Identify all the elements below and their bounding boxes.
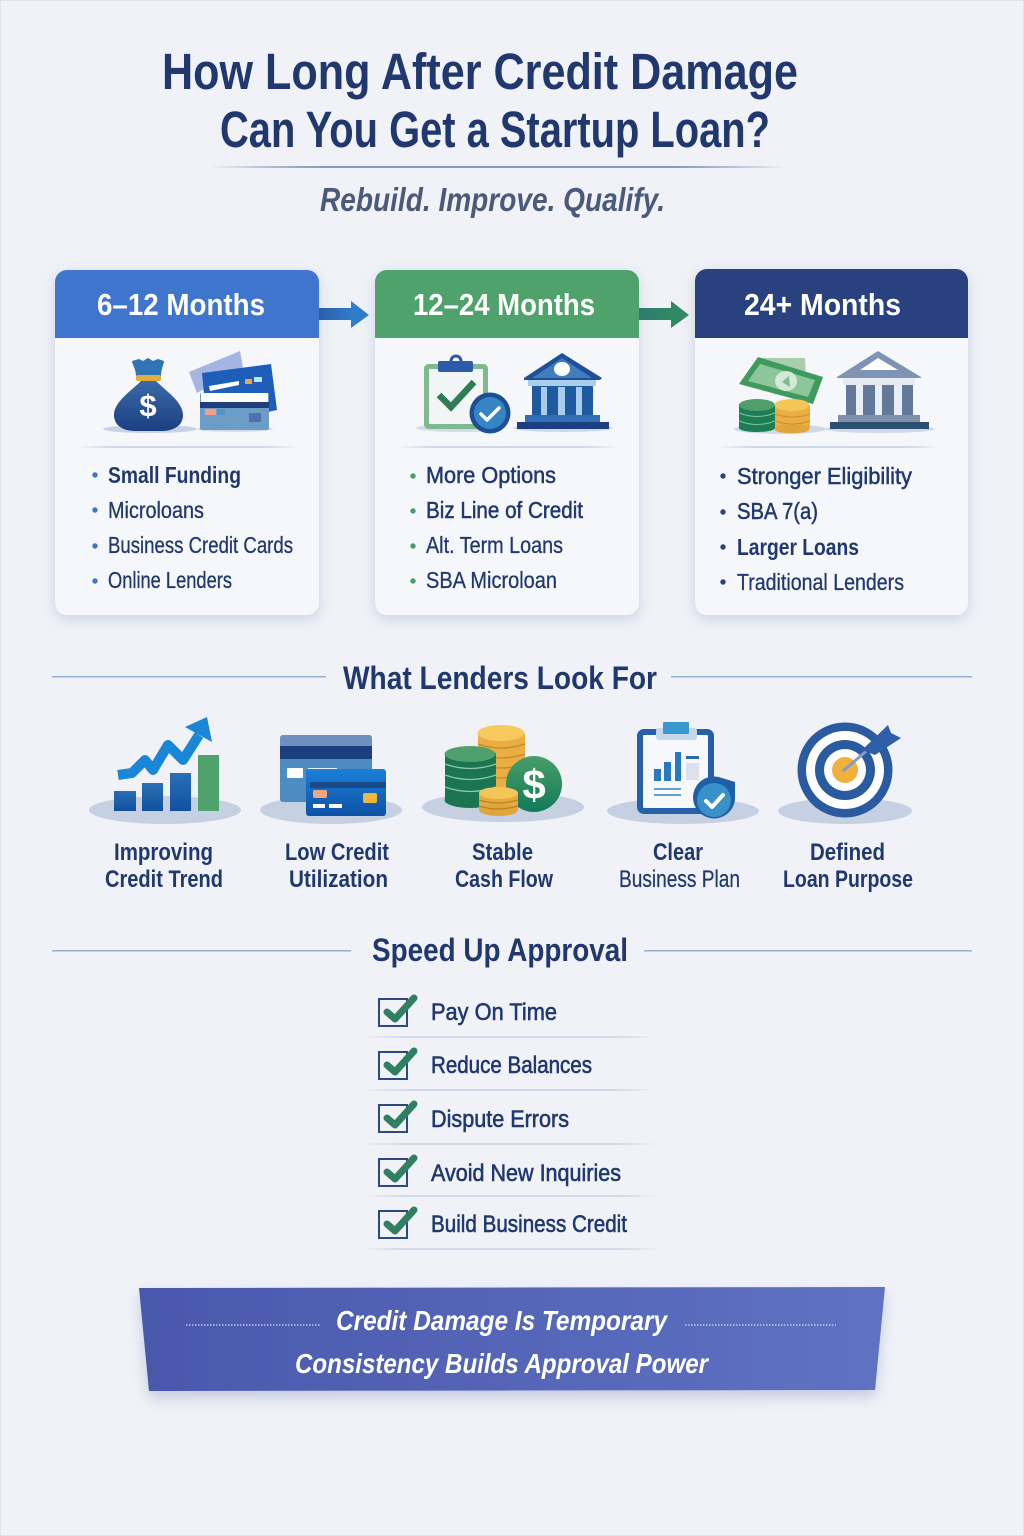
caption: clear business plan: Clear <box>653 839 703 866</box>
list: 6-12 months <box>92 462 293 593</box>
banner: closing message <box>139 1287 885 1391</box>
item: build business credit: Build Business Credit <box>431 1211 627 1238</box>
list: 6-12 months: Online Lenders <box>108 567 232 593</box>
caption: defined loan purpose <box>783 839 913 893</box>
caption: improving credit trend: Credit Trend <box>105 866 223 893</box>
item: dispute errors: Dispute Errors <box>431 1106 569 1133</box>
icon: gray bank <box>825 351 935 433</box>
caption: stable cash flow: Stable <box>472 839 533 866</box>
section heading: what lenders look for: What Lenders Look For <box>343 660 657 696</box>
section heading: speed up approval: Speed Up Approval <box>372 932 628 968</box>
list: 12-24 months: SBA Microloan <box>426 567 557 593</box>
arrow: to 12-24 months <box>319 301 369 328</box>
list: 6-12 months: Microloans <box>108 497 204 523</box>
list: 6-12 months: Small Funding <box>108 462 241 488</box>
banner: closing message: Credit Damage Is Temporary <box>336 1305 668 1336</box>
icon: clipboard check <box>416 356 510 434</box>
caption: stable cash flow <box>455 839 553 893</box>
arrow: to 24+ months <box>639 301 689 328</box>
icon: improving credit trend <box>89 717 241 824</box>
caption: low credit utilization <box>285 839 389 893</box>
icon: credit cards <box>189 351 277 432</box>
icon: money bag: $ <box>139 388 157 423</box>
list: 6-12 months: Business Credit Cards <box>108 532 293 558</box>
caption: stable cash flow: Cash Flow <box>455 866 553 893</box>
item: pay on time <box>379 998 557 1026</box>
list: 12-24 months: Alt. Term Loans <box>426 532 563 558</box>
icon: money bag <box>103 358 197 433</box>
list: 24+ months: Stronger Eligibility <box>737 463 912 489</box>
list: 12-24 months: Biz Line of Credit <box>426 497 584 523</box>
caption: clear business plan <box>619 839 740 893</box>
item: reduce balances: Reduce Balances <box>431 1052 592 1079</box>
icon: defined loan purpose target <box>778 722 912 824</box>
icon: stable cash flow: $ <box>522 761 546 808</box>
caption: defined loan purpose: Defined <box>810 839 885 866</box>
item: build business credit <box>379 1210 627 1238</box>
caption: clear business plan: Business Plan <box>619 866 740 893</box>
item: avoid new inquiries <box>379 1158 621 1187</box>
header: 12-24 months <box>375 270 639 338</box>
caption: improving credit trend <box>105 839 223 893</box>
icon: low credit utilization <box>260 735 402 824</box>
icon: bank <box>513 353 613 432</box>
item: pay on time: Pay On Time <box>431 999 557 1026</box>
subtitle: Rebuild. Improve. Qualify. <box>320 181 665 218</box>
checklist <box>362 998 659 1250</box>
caption: improving credit trend: Improving <box>114 839 213 866</box>
caption: defined loan purpose: Loan Purpose <box>783 866 913 893</box>
panel: 6-12 months <box>55 270 319 615</box>
item: avoid new inquiries: Avoid New Inquiries <box>431 1160 621 1187</box>
header: 6-12 months <box>55 270 319 338</box>
list: 24+ months: SBA 7(a) <box>737 498 818 524</box>
banner: closing message: Consistency Builds Approval Power <box>295 1348 710 1379</box>
title: How Long After Credit Damage <box>162 43 798 100</box>
icon: clear business plan <box>607 722 759 824</box>
header: 12-24 months: 12–24 Months <box>413 287 595 322</box>
item: dispute errors <box>379 1104 569 1133</box>
header: 24+ months: 24+ Months <box>744 287 901 322</box>
list: 24+ months: Traditional Lenders <box>737 569 904 595</box>
header: 24+ months <box>695 269 968 338</box>
item: reduce balances <box>379 1051 592 1079</box>
list: 24+ months: Larger Loans <box>737 534 859 560</box>
caption: low credit utilization: Low Credit <box>285 839 389 866</box>
icon: cash and coins <box>734 357 826 434</box>
icon: stable cash flow <box>422 725 584 822</box>
header: 6-12 months: 6–12 Months <box>97 287 265 322</box>
list: 24+ months <box>720 463 912 595</box>
panel: 12-24 months <box>375 270 639 615</box>
title <box>162 43 798 158</box>
list: 12-24 months <box>410 462 584 593</box>
title: Can You Get a Startup Loan? <box>220 101 770 158</box>
panel: 24+ months <box>695 269 968 615</box>
list: 12-24 months: More Options <box>426 462 556 488</box>
caption: low credit utilization: Utilization <box>289 866 388 893</box>
